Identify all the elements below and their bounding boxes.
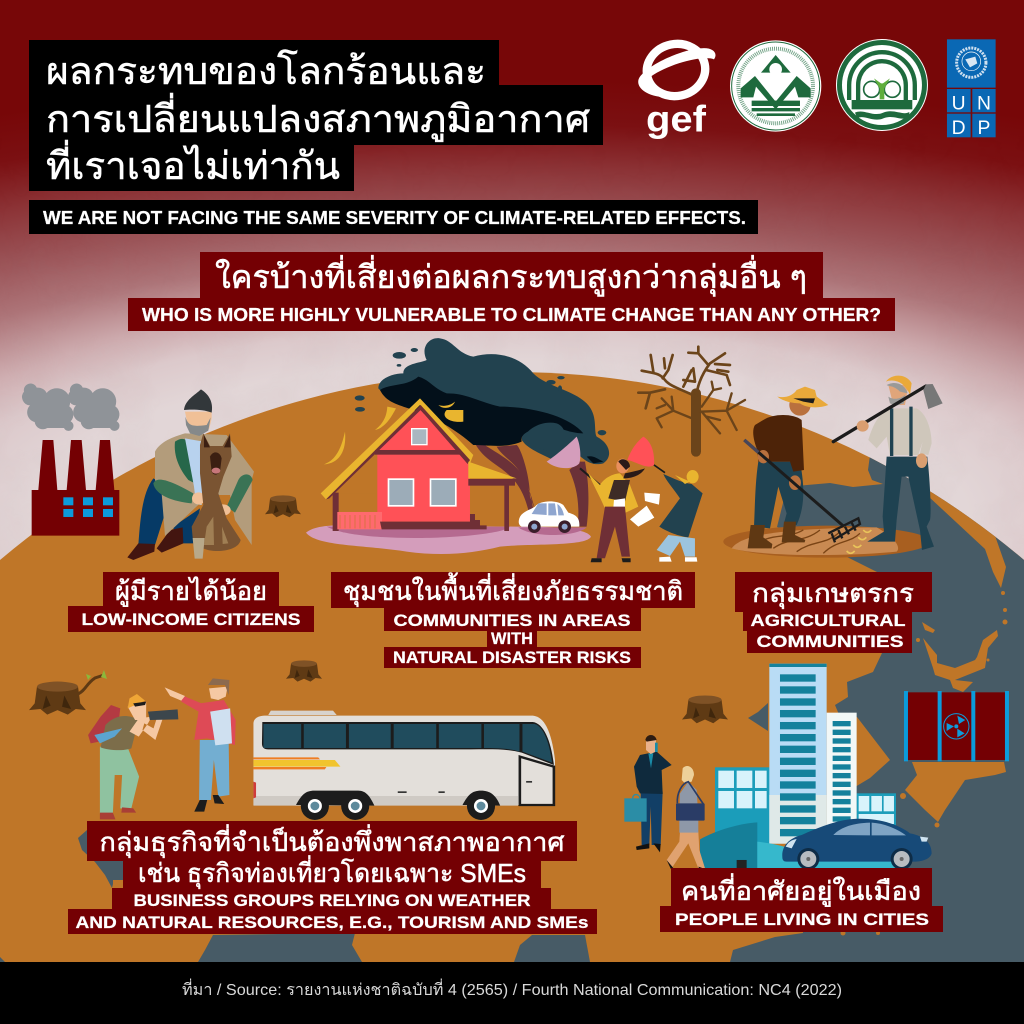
photographer	[88, 694, 178, 819]
label: people living in cities	[660, 868, 943, 932]
label: weather-reliant business groups: กลุ่มธุรกิจที่จำเป็นต้องพึ่งพาสภาพอากาศ	[100, 824, 565, 858]
logo: UNDP: N	[977, 93, 991, 114]
illustration: factory with smoke	[22, 384, 119, 536]
illustration: low-income man with dog	[127, 389, 254, 560]
label: people living in cities: PEOPLE LIVING IN CITIES	[675, 910, 929, 929]
logo: green tree seal	[836, 39, 928, 131]
title block: ผลกระทบของโลกร้อนและ	[46, 49, 486, 93]
English subtitle: WE ARE NOT FACING THE SAME SEVERITY OF CLIMATE-RELATED EFFECTS.	[43, 208, 746, 228]
icon: tree stump, right	[682, 695, 728, 723]
footer source bar: ที่มา / Source: รายงานแห่งชาติฉบับที่ 4 (2565) / Fourth National Communication: NC4 (2022)	[182, 978, 842, 999]
title block: การเปลี่ยนแปลงสภาพภูมิอากาศ	[46, 93, 590, 142]
storm cloud	[355, 338, 609, 464]
guide with map	[165, 678, 236, 812]
label: agricultural communities: กลุ่มเกษตรกร	[752, 578, 914, 609]
label: communities in disaster areas	[331, 572, 695, 668]
label: communities in disaster areas: WITH	[491, 629, 533, 648]
label: weather-reliant business groups: BUSINESS GROUPS RELYING ON WEATHER	[134, 891, 530, 910]
label: weather-reliant business groups: เช่น ธุรกิจท่องเที่ยวโดยเฉพาะ SMEs	[138, 855, 526, 889]
wind-blown thatch	[324, 402, 455, 464]
footer source bar	[0, 962, 1024, 1024]
person with purple umbrella	[547, 437, 645, 562]
question heading	[128, 252, 895, 331]
farmer with rake	[744, 387, 860, 548]
illustration: tour bus	[253, 711, 555, 820]
English subtitle	[29, 200, 758, 234]
illustration: blue car	[782, 819, 932, 870]
illustration: businessman and woman	[624, 735, 712, 871]
tilled field	[723, 526, 930, 558]
icon: nuclear plant flag	[904, 691, 1009, 761]
logo: GEF	[638, 38, 716, 140]
farmer with hoe	[833, 376, 943, 550]
logo: UNDP: U	[952, 93, 966, 114]
papers	[630, 493, 660, 527]
person with red umbrella	[627, 437, 703, 562]
logo: UNDP: D	[952, 118, 966, 139]
label: people living in cities: คนที่อาศัยอยู่ในเมือง	[681, 873, 921, 907]
question heading: ใครบ้างที่เสี่ยงต่อผลกระทบสูงกว่ากลุ่มอื่น ๆ	[215, 255, 807, 297]
question heading: WHO IS MORE HIGHLY VULNERABLE TO CLIMATE CHANGE THAN ANY OTHER?	[142, 304, 881, 325]
house	[321, 398, 517, 531]
icon: tree stump, middle	[286, 660, 322, 682]
label: communities in disaster areas: COMMUNITIES IN AREAS	[394, 611, 630, 630]
illustration: tourists	[88, 678, 236, 819]
logo: green mountain seal	[730, 40, 821, 132]
flood puddle	[306, 525, 591, 554]
label: weather-reliant business groups: AND NATURAL RESOURCES, E.G., TOURISM AND SMEs	[76, 913, 588, 932]
illustration: bare tree	[638, 347, 745, 452]
label: weather-reliant business groups	[68, 821, 597, 934]
logo: UNDP	[947, 39, 996, 139]
illustration: house in storm	[306, 338, 703, 562]
icon: tree stump with sprout	[29, 670, 107, 715]
label: communities in disaster areas: NATURAL DISASTER RISKS	[393, 648, 631, 667]
sky background	[0, 117, 1024, 560]
globe with land and ocean	[0, 372, 1024, 962]
label: agricultural communities: AGRICULTURAL	[750, 611, 906, 630]
logo: UNDP: P	[978, 118, 990, 139]
label: low-income citizens	[68, 572, 314, 632]
label: agricultural communities	[735, 572, 932, 653]
label: low-income citizens: LOW-INCOME CITIZENS	[82, 610, 300, 629]
title block: ที่เราเจอไม่เท่ากัน	[46, 140, 340, 188]
icon: tree stump, centre	[265, 495, 301, 517]
label: agricultural communities: COMMUNITIES	[756, 632, 904, 651]
title block	[29, 40, 603, 191]
logo: GEF: gef	[646, 98, 707, 140]
bent trees	[473, 440, 588, 527]
label: communities in disaster areas: ชุมชนในพื้นที่เสี่ยงภัยธรรมชาติ	[343, 572, 683, 607]
white car	[519, 501, 579, 533]
illustration: two farmers on field	[723, 376, 943, 558]
illustration: city buildings	[700, 664, 897, 868]
label: low-income citizens: ผู้มีรายได้น้อย	[115, 576, 267, 607]
